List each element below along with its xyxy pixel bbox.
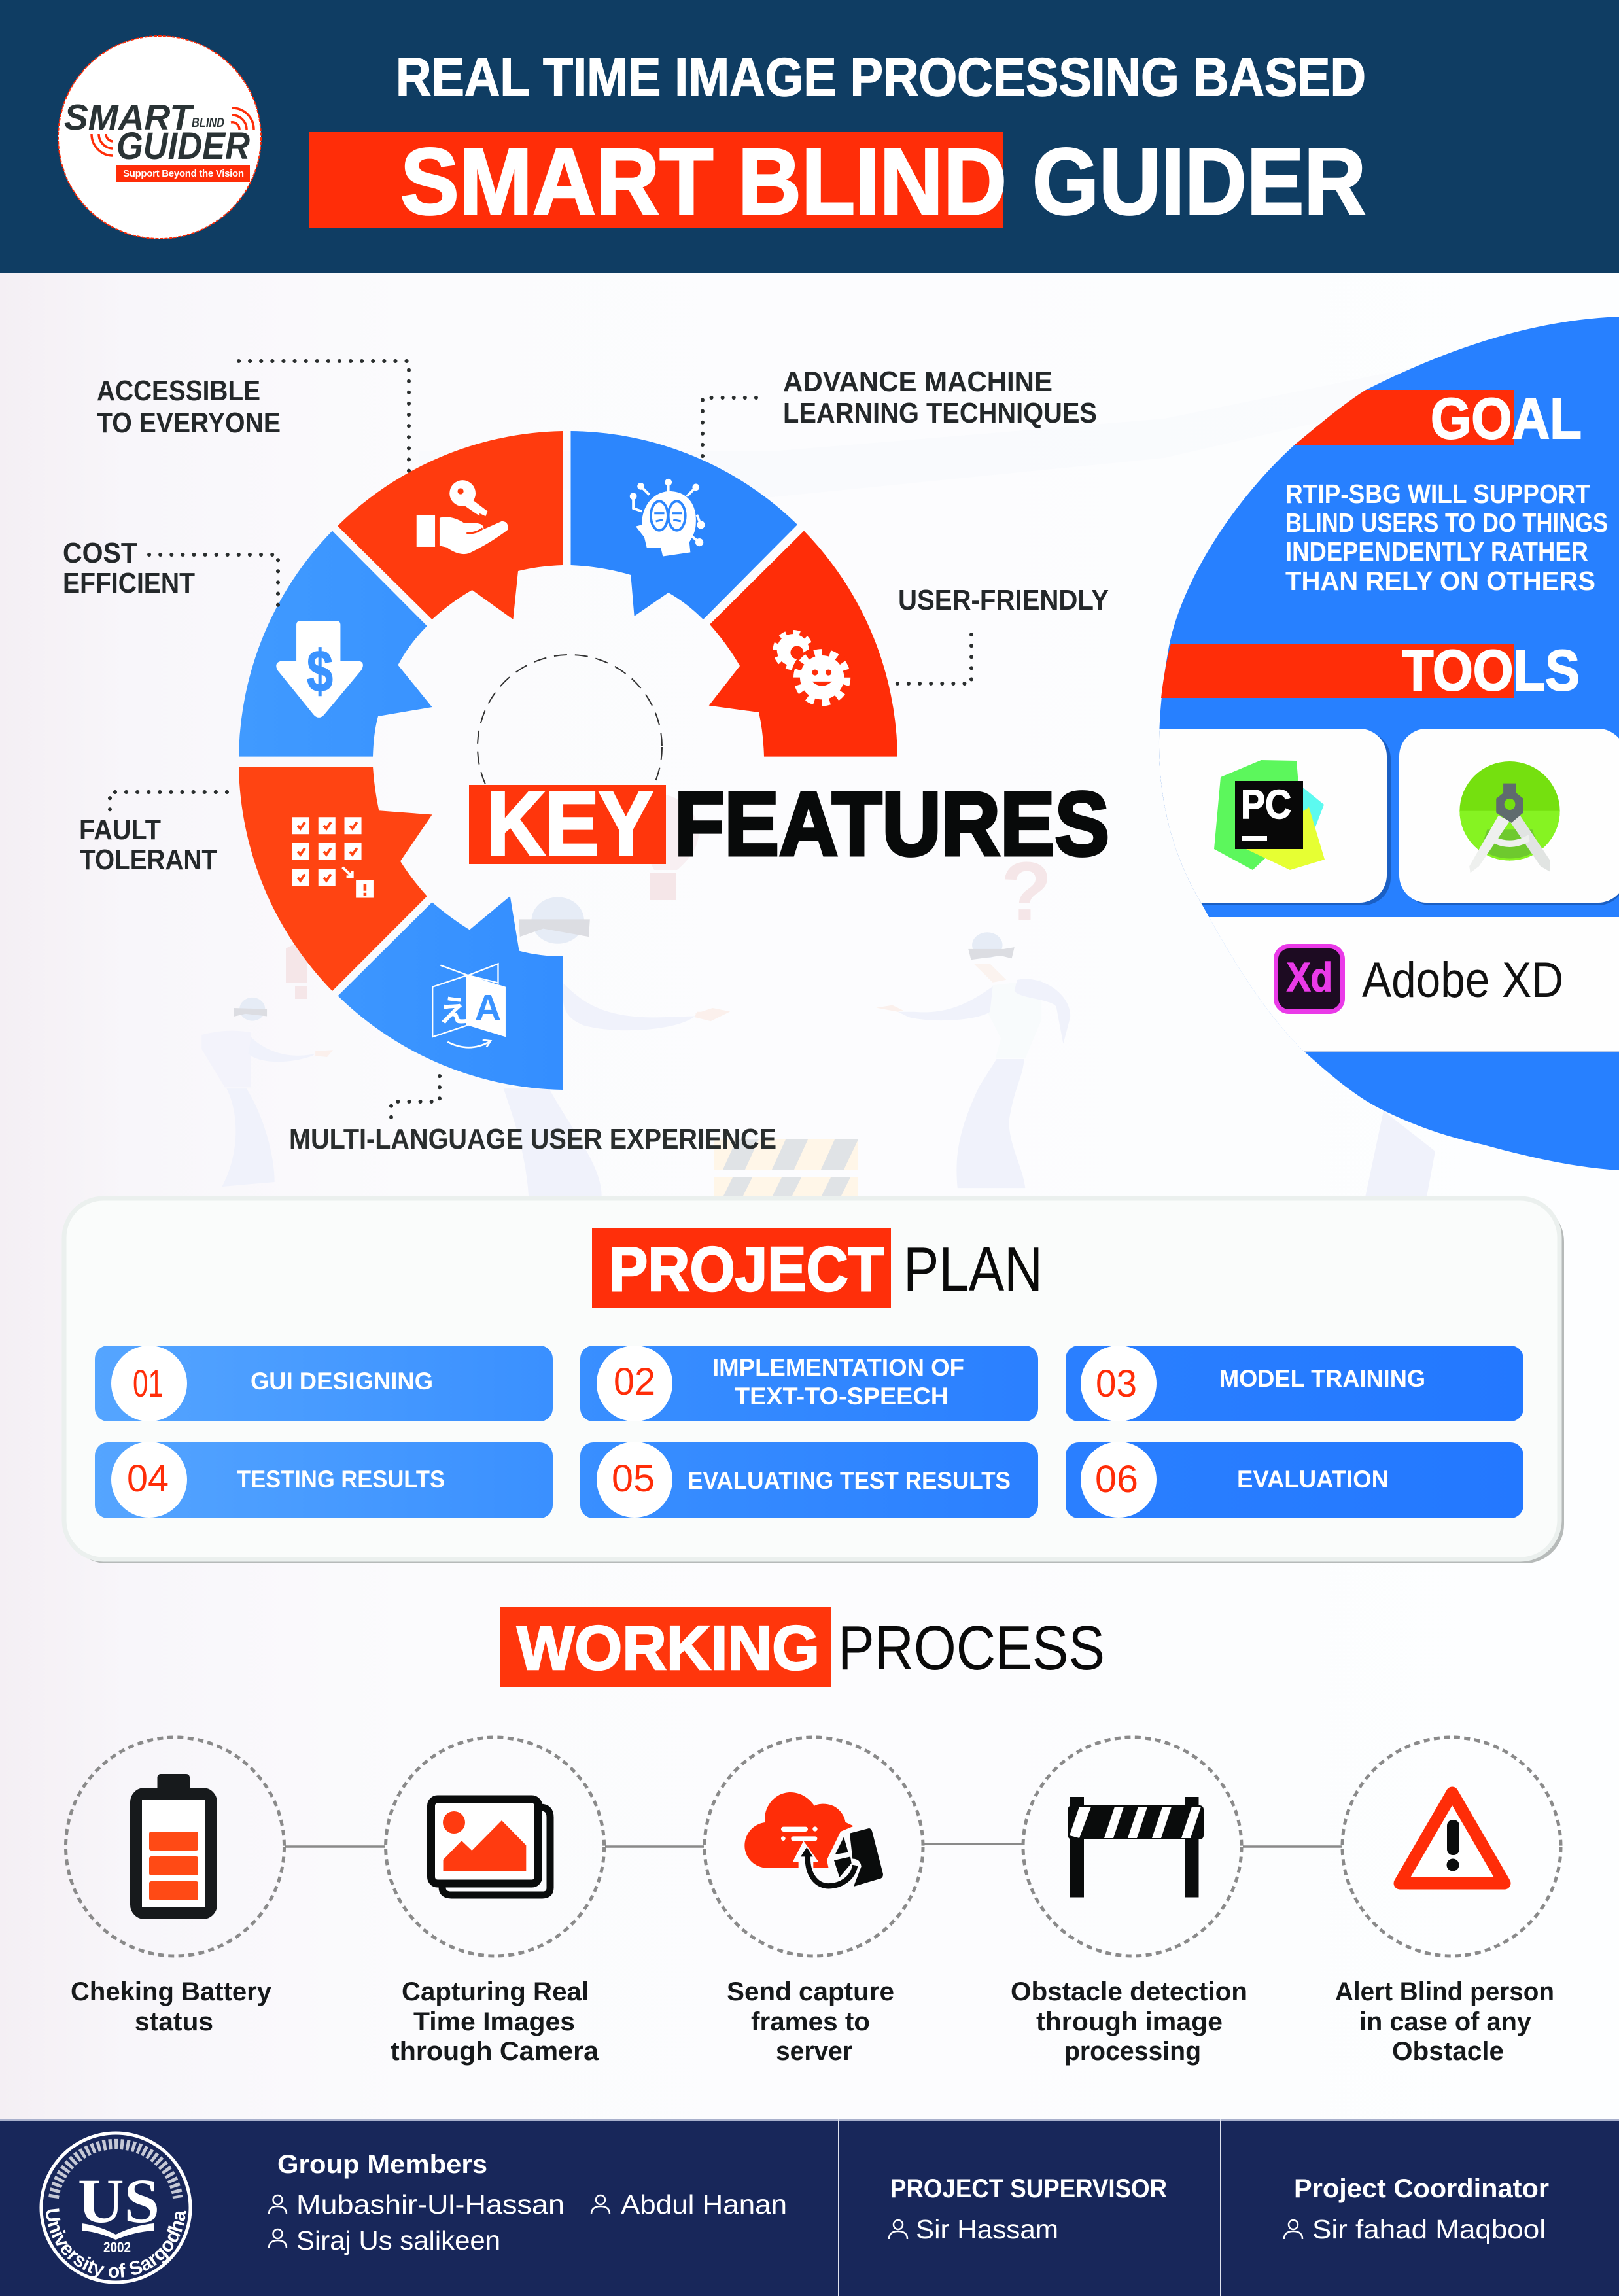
panel: goal and tools — [1125, 317, 1619, 1170]
icon: dollar down arrow: $ — [307, 638, 333, 704]
callout: accessible to everyone: TO EVERYONE — [97, 407, 281, 439]
icon: checklist with alert — [292, 817, 374, 897]
step 05: 05 — [612, 1457, 655, 1500]
logo: smart blind guider: Support Beyond the Vision — [123, 168, 244, 179]
step: obstacle detection — [1011, 1737, 1247, 2066]
step: capturing images: Time Images — [413, 2008, 575, 2036]
step: alert person — [1335, 1737, 1561, 2066]
goal description — [1285, 479, 1608, 596]
title line two: highlighted: SMART BLIND — [400, 129, 1007, 234]
callout: fault tolerant: FAULT — [79, 814, 161, 846]
wheel segment: multi-language — [338, 896, 563, 1090]
step: obstacle detection: Obstacle detection — [1011, 1977, 1247, 2006]
step 04 — [95, 1442, 553, 1518]
wheel segment: fault tolerant — [239, 767, 432, 991]
step 05: EVALUATING TEST RESULTS — [688, 1467, 1011, 1494]
icon: brain in head — [630, 479, 705, 557]
project coordinator: Sir fahad Maqbool — [1312, 2214, 1546, 2244]
title line one: REAL TIME IMAGE PROCESSING BASED — [396, 46, 1366, 107]
tool card: pycharm — [1159, 729, 1391, 905]
step: send to server — [705, 1737, 923, 2066]
project coordinator — [1284, 2174, 1549, 2244]
university seal: US — [78, 2166, 160, 2236]
project supervisor: PROJECT SUPERVISOR — [890, 2174, 1167, 2203]
project supervisor — [889, 2174, 1167, 2244]
ghost figure: left — [201, 998, 333, 1187]
member: siraj: Siraj Us salikeen — [296, 2225, 500, 2255]
group members: Group Members — [277, 2150, 487, 2179]
callout: fault tolerant — [79, 792, 227, 876]
ghost barrier — [714, 1139, 858, 1197]
goal description: THAN RELY ON OTHERS — [1285, 566, 1595, 596]
wheel segment: machine learning — [570, 431, 797, 619]
step: alert person: Alert Blind person — [1335, 1977, 1554, 2006]
icon: translation book: え — [438, 986, 470, 1031]
step 06 — [1066, 1442, 1523, 1518]
callout: user-friendly: USER-FRIENDLY — [898, 584, 1109, 616]
heading: working: WORKING — [517, 1613, 820, 1683]
step: capturing images: through Camera — [391, 2037, 599, 2066]
callout: machine learning: ADVANCE MACHINE — [783, 366, 1053, 398]
logo: smart blind guider — [58, 36, 261, 239]
step 05 — [580, 1442, 1038, 1518]
footer — [0, 2119, 1619, 2296]
step: capturing images: Capturing Real — [402, 1977, 589, 2006]
callout: cost efficient: COST — [63, 537, 137, 569]
logo: smart blind guider: GUIDER — [116, 125, 250, 167]
icon: pycharm — [1214, 760, 1325, 870]
blue disc — [1159, 317, 1619, 1170]
wheel segment: cost efficient — [239, 531, 432, 757]
step: send to server: server — [776, 2037, 852, 2066]
step 03: 03 — [1096, 1363, 1137, 1405]
step: obstacle detection: processing — [1064, 2037, 1201, 2066]
group members — [269, 2150, 787, 2255]
step 01: GUI DESIGNING — [251, 1368, 433, 1395]
step: send to server: frames to — [751, 2008, 870, 2036]
callout: machine learning — [703, 366, 1097, 460]
panel: key features wheel — [63, 361, 1109, 1155]
callout: accessible to everyone — [97, 361, 409, 474]
callout: cost efficient — [63, 537, 278, 605]
icon: translation book — [432, 964, 506, 1047]
step 04: TESTING RESULTS — [237, 1466, 445, 1493]
ghost figure: right — [695, 932, 1070, 1188]
heading: process: PROCESS — [838, 1613, 1105, 1683]
icon: translation book: A — [475, 988, 501, 1029]
step 02: TEXT-TO-SPEECH — [735, 1383, 949, 1410]
dashed center circle — [478, 655, 662, 839]
tools red band — [1161, 644, 1514, 698]
goal description: INDEPENDENTLY RATHER — [1285, 536, 1588, 566]
goal red band — [1295, 390, 1514, 445]
question mark: ? — [1001, 845, 1052, 939]
title line two: guider: GUIDER — [1032, 129, 1366, 234]
step 02 — [580, 1346, 1038, 1421]
step: checking battery — [65, 1737, 284, 2036]
header banner — [0, 0, 1619, 273]
key heading highlight — [469, 785, 666, 864]
tool band: adobe xd: Xd — [1287, 955, 1332, 1000]
step 03 — [1066, 1346, 1523, 1421]
goal heading: GOAL — [1431, 386, 1582, 451]
working heading highlight — [500, 1607, 831, 1687]
wheel segment: user friendly — [709, 531, 897, 757]
step 01 — [95, 1346, 553, 1421]
step: capturing images — [386, 1737, 604, 2066]
step 04: 04 — [127, 1457, 169, 1500]
callout: machine learning: LEARNING TECHNIQUES — [783, 397, 1097, 429]
faint background illustration — [201, 366, 1435, 1200]
callout: cost efficient: EFFICIENT — [63, 567, 195, 599]
tools heading: TOOLS — [1402, 638, 1580, 703]
icon: smiling gears — [776, 633, 853, 708]
step: checking battery: Cheking Battery — [71, 1977, 272, 2006]
step: send to server: Send capture — [727, 1977, 894, 2006]
goal description: RTIP-SBG WILL SUPPORT — [1285, 479, 1590, 509]
step 06: EVALUATION — [1237, 1466, 1389, 1493]
member: abdul: Abdul Hanan — [621, 2189, 787, 2219]
icon: dollar down arrow — [276, 621, 363, 718]
callout: fault tolerant: TOLERANT — [80, 844, 217, 876]
step: checking battery: status — [135, 2008, 213, 2036]
ghost figure: center — [504, 897, 730, 1196]
tool band: adobe xd — [1177, 917, 1619, 1052]
step: alert person: Obstacle — [1392, 2037, 1504, 2066]
wheel segment: accessible to everyone — [338, 431, 563, 619]
callout: multi-language: MULTI-LANGUAGE USER EXPERIENCE — [289, 1123, 776, 1155]
university seal: University of Sargodha — [46, 2208, 186, 2278]
step 02: 02 — [614, 1361, 655, 1403]
heading: key: KEY — [487, 774, 653, 875]
callout: accessible to everyone: ACCESSIBLE — [97, 375, 260, 407]
step 03: MODEL TRAINING — [1219, 1365, 1425, 1392]
panel: working process — [65, 1607, 1561, 2066]
step: obstacle detection: through image — [1036, 2008, 1223, 2036]
step: alert person: in case of any — [1359, 2008, 1532, 2036]
icon: hand holding key — [417, 480, 508, 554]
connector lines — [285, 1844, 1342, 1847]
project coordinator: Project Coordinator — [1294, 2174, 1549, 2203]
red title highlight — [309, 132, 1003, 228]
heading: project: PROJECT — [609, 1234, 884, 1304]
step 01: 01 — [133, 1363, 164, 1405]
project heading highlight — [592, 1228, 891, 1308]
step 06: 06 — [1095, 1458, 1138, 1501]
step 02: IMPLEMENTATION OF — [712, 1354, 964, 1381]
tool band: adobe xd: Adobe XD — [1362, 952, 1563, 1008]
project supervisor: Sir Hassam — [916, 2214, 1058, 2244]
logo: smart blind guider: SMART — [64, 97, 194, 137]
callout: user-friendly — [890, 584, 1109, 684]
heading: plan: PLAN — [903, 1234, 1043, 1304]
panel: project plan — [64, 1198, 1564, 1563]
member: mubashir: Mubashir-Ul-Hassan — [296, 2189, 565, 2219]
icon: pycharm: PC — [1241, 782, 1291, 827]
university seal — [39, 2131, 192, 2284]
tool card: android studio — [1399, 729, 1619, 905]
callout: multi-language — [289, 1076, 776, 1155]
logo: smart blind guider: BLIND — [192, 116, 224, 130]
university seal: 2002 — [103, 2239, 131, 2255]
heading: features: FEATURES — [674, 774, 1109, 875]
